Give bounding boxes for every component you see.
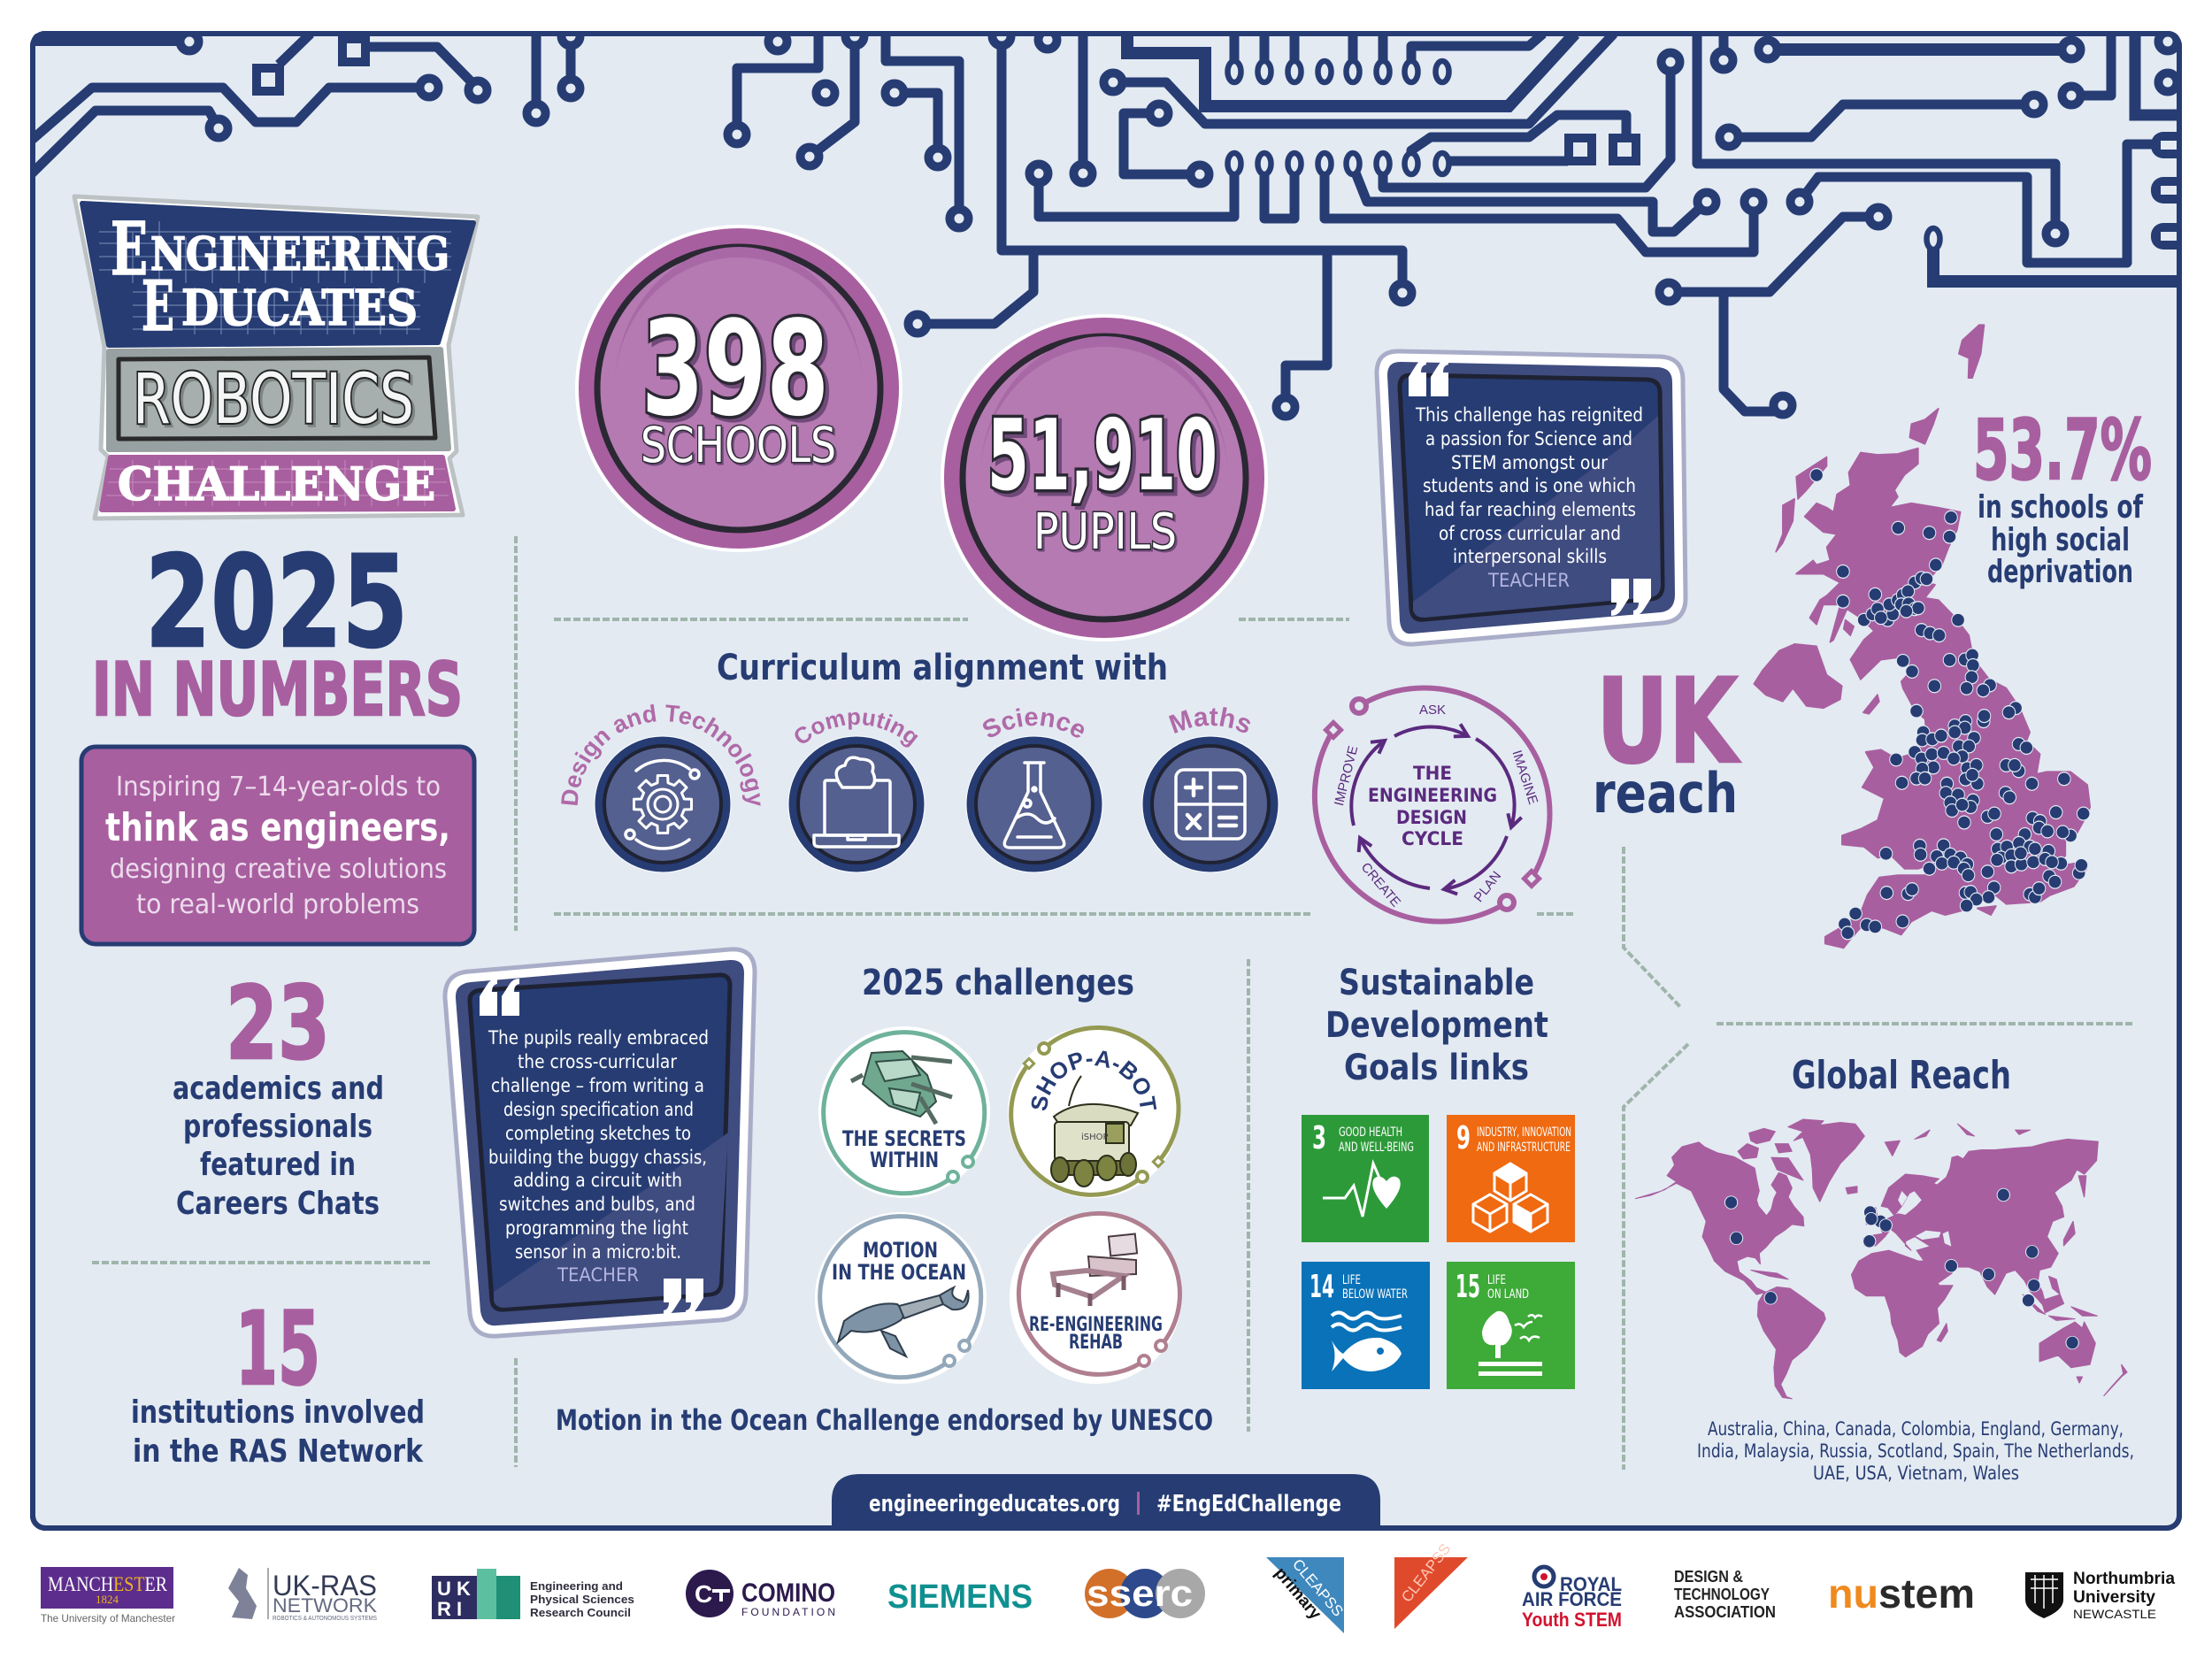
heading: Global Reach: Global Reach — [1792, 1053, 2011, 1098]
footer tab: website and hashtag — [832, 1474, 1380, 1530]
quote text: The pupils really embraced — [488, 1027, 709, 1048]
partner logo: UK-RAS Network: ROBOTICS & AUTONOMOUS SYSTEMS — [273, 1616, 377, 1622]
heading: Sustainable Development Goals links: Development — [1325, 1005, 1548, 1046]
challenge badge: Motion in the Ocean: IN THE OCEAN — [832, 1260, 966, 1285]
world map with country dots — [1635, 1119, 2127, 1399]
icon: laptop and cloud — [814, 757, 899, 847]
stat circle: 398 schools: 398 — [641, 293, 829, 445]
SDG tile 3: GOOD HEALTH — [1339, 1125, 1402, 1140]
partner logo: UKRI EPSRC: Research Council — [530, 1606, 631, 1619]
partner logo: UK-RAS Network: NETWORK — [273, 1594, 377, 1617]
quote text: a passion for Science and — [1425, 428, 1632, 449]
SDG tile 14 — [1302, 1262, 1430, 1389]
partner logo: Comino Foundation: FOUNDATION — [741, 1606, 835, 1618]
quote text: TEACHER — [1487, 570, 1570, 591]
challenge badge: Re-Engineering Rehab: REHAB — [1069, 1332, 1123, 1354]
curriculum heading: Curriculum alignment with — [717, 648, 1168, 688]
UNESCO endorsement line: Motion in the Ocean Challenge endorsed by UNESCO — [556, 1403, 1213, 1437]
heading: Sustainable Development Goals links: Sustainable — [1339, 963, 1534, 1003]
partner logo: University of Manchester: MANCHESTER — [48, 1573, 168, 1595]
quote text: sensor in a micro:bit. — [515, 1241, 681, 1263]
engineering design cycle: IMAGINE — [1509, 749, 1540, 806]
partner logo: SSERC: sserc — [1087, 1572, 1193, 1614]
partner logo: Royal Air Force Youth STEM: AIR FORCE — [1522, 1588, 1622, 1610]
purple mission box: designing creative solutions — [110, 854, 447, 885]
heading: 2025 in numbers — [92, 528, 463, 733]
engineering design cycle: PLAN — [1471, 869, 1504, 905]
logo banner: Engineering Educates: E — [142, 266, 174, 347]
partner logo: CLEAPSS design and technology: CLEAPSS — [1398, 1540, 1454, 1605]
quote text: building the buggy chassis, — [488, 1147, 707, 1168]
teacher quote panel: left — [445, 949, 755, 1336]
stat circle: 51,910 pupils: PUPILS — [1033, 503, 1177, 561]
UK map with school dots — [1754, 325, 2090, 948]
heading: UK reach: UK — [1596, 654, 1741, 790]
country dots — [1724, 1188, 2078, 1349]
partner logo: nustem: nustem — [1828, 1571, 1975, 1617]
quote text: design specification and — [503, 1099, 694, 1120]
partner logo: Northumbria University — [2025, 1570, 2175, 1621]
logo banner: Engineering Educates: E — [111, 207, 148, 292]
challenge badge: Shop-a-Bot — [1008, 1025, 1180, 1198]
quote text: interpersonal skills — [1453, 546, 1607, 567]
footer tab: website and hashtag: engineeringeducates.org — [869, 1491, 1120, 1517]
stat circle: 398 schools — [575, 225, 902, 552]
illustration: delivery robot — [1051, 1076, 1138, 1187]
icon: calculator — [1176, 770, 1245, 839]
quote text: completing sketches to — [505, 1123, 691, 1144]
country list — [1697, 1418, 2134, 1484]
partner logo: Northumbria University: University — [2073, 1588, 2155, 1607]
engineering design cycle: CYCLE — [1402, 828, 1463, 849]
partner logo: UKRI EPSRC: Engineering and — [530, 1579, 623, 1593]
curriculum: Design and Technology: Design and Technology — [561, 704, 761, 806]
heading: 2025 in numbers: IN NUMBERS — [92, 647, 463, 733]
quote text: had far reaching elements — [1425, 499, 1636, 520]
purple mission box: think as engineers, — [105, 805, 450, 850]
challenge badge: The Secrets Within: WITHIN — [870, 1148, 939, 1172]
engineering design cycle: THE — [1413, 763, 1452, 784]
partner logo: UKRI EPSRC: Physical Sciences — [530, 1593, 634, 1606]
SDG tile 3 — [1302, 1115, 1429, 1242]
stat: 23 academics and professionals — [173, 964, 384, 1222]
footer tab: website and hashtag: #EngEdChallenge — [1156, 1491, 1341, 1517]
logo: Engineering Educates Robotics Challenge — [74, 196, 478, 518]
partner logo: CLEAPSS design and technology — [1394, 1540, 1468, 1629]
SDG tile 15: 15 — [1455, 1269, 1480, 1305]
stat: 53.7% deprivation: in schools of — [1978, 489, 2143, 526]
quote text — [488, 1027, 709, 1286]
curriculum: Science: Science — [982, 708, 1084, 738]
stat: 15 institutions: 15 — [235, 1290, 320, 1408]
SDG tile 9: AND INFRASTRUCTURE — [1477, 1141, 1571, 1155]
SDG tile 15: ON LAND — [1487, 1287, 1529, 1302]
heading: 2025 challenges: 2025 challenges — [862, 963, 1134, 1003]
purple mission box: to real-world problems — [136, 889, 419, 920]
circuit board traces — [32, 27, 2205, 416]
logo banner: Robotics: ROBOTICS — [133, 360, 414, 440]
heading: UK reach: reach — [1593, 761, 1738, 826]
curriculum: Design and Technology — [561, 704, 761, 872]
heading: Sustainable Development Goals links — [1325, 963, 1548, 1088]
partner logo: University of Manchester: 1824 — [96, 1593, 119, 1606]
partner logo: Northumbria University: Northumbria — [2073, 1570, 2175, 1588]
curriculum: Computing: Computing — [795, 711, 918, 748]
partner logo: CLEAPSS primary: CLEAPSS — [1289, 1555, 1347, 1620]
curriculum: Computing — [787, 711, 926, 872]
closing quote mark — [664, 1279, 703, 1316]
partner logo: Comino Foundation — [686, 1570, 835, 1618]
engineering design cycle: CREATE — [1358, 860, 1403, 910]
quote text: the cross-curricular — [518, 1051, 677, 1072]
school location dots — [1810, 469, 2090, 940]
stat circle: 398 schools: SCHOOLS — [641, 417, 836, 473]
teacher quote panel: top — [1377, 351, 1686, 644]
illustration: rehab frame — [1053, 1233, 1137, 1306]
partner logo: Royal Air Force Youth STEM: Youth STEM — [1522, 1609, 1622, 1631]
quote text: adding a circuit with — [513, 1170, 682, 1191]
SDG tile 14: BELOW WATER — [1342, 1287, 1408, 1302]
opening quote mark — [1409, 359, 1448, 396]
partner logo: Siemens: SIEMENS — [887, 1578, 1033, 1616]
partner logo: UKRI EPSRC — [432, 1569, 634, 1620]
challenge badge: Shop-a-Bot: iSHOP — [1081, 1133, 1109, 1142]
purple mission box — [81, 747, 474, 944]
logo banner: Engineering Educates: NGINEERING — [150, 228, 449, 281]
stat: 15 institutions: institutions involved — [131, 1394, 425, 1431]
partner logo: University of Manchester: The University of Manchester — [41, 1612, 175, 1624]
challenge badge: The Secrets Within: THE SECRETS — [842, 1126, 966, 1151]
stat: 53.7% deprivation: deprivation — [1987, 554, 2133, 590]
logo banner: Engineering Educates — [82, 204, 473, 347]
stat circle: 51,910 pupils: 51,910 — [987, 399, 1217, 513]
SDG tile 15 — [1447, 1262, 1575, 1389]
icon: flask — [1004, 763, 1064, 848]
partner logo: CLEAPSS primary — [1266, 1555, 1347, 1633]
challenge badge: Motion in the Ocean — [815, 1212, 987, 1384]
engineering design cycle: ENGINEERING — [1368, 785, 1497, 806]
country list: Australia, China, Canada, Colombia, England, Germany, — [1708, 1418, 2124, 1440]
challenge badge: Re-Engineering Rehab: RE-ENGINEERING — [1029, 1314, 1163, 1336]
SDG tile 15: LIFE — [1487, 1273, 1506, 1287]
purple mission box: Inspiring 7–14-year-olds to — [116, 772, 441, 803]
partner logo: Design and Technology Association: ASSOCIATION — [1674, 1603, 1776, 1621]
quote text — [1415, 404, 1643, 591]
illustration: robotic whale — [838, 1287, 969, 1356]
stat: 53.7% deprivation: high social — [1991, 522, 2130, 558]
SDG tile 9: 9 — [1456, 1120, 1471, 1156]
engineering design cycle — [1315, 687, 1550, 921]
stat circle: 51,910 pupils — [941, 314, 1268, 641]
stat: 15 institutions: in the RAS Network — [133, 1433, 424, 1470]
quote text: programming the light — [505, 1217, 688, 1239]
partner logo: CLEAPSS primary: primary — [1271, 1564, 1325, 1624]
SDG tile 3: 3 — [1312, 1120, 1326, 1156]
dashed section dividers — [92, 536, 2134, 1470]
SDG tile 9 — [1447, 1115, 1575, 1242]
quote text: of cross curricular and — [1439, 523, 1621, 544]
partner logo: Comino Foundation: COMINO — [741, 1578, 835, 1608]
quote text: STEM amongst our — [1451, 452, 1608, 473]
logo banner: Robotics — [109, 349, 449, 449]
icon: gear — [626, 760, 699, 849]
stat: 23 academics and professionals: Careers Chats — [176, 1186, 380, 1222]
engineering design cycle: DESIGN — [1396, 807, 1467, 828]
heading: Sustainable Development Goals links: Goals links — [1344, 1048, 1529, 1088]
stat: 23 academics and professionals: featured in — [200, 1147, 356, 1183]
engineering design cycle: ASK — [1419, 703, 1446, 718]
partner logo: SSERC — [1085, 1569, 1205, 1618]
partner logo: UKRI EPSRC: R I — [437, 1598, 462, 1620]
partner logo: UKRI EPSRC: U K — [437, 1578, 471, 1600]
closing quote mark — [1611, 579, 1651, 616]
SDG tile 14: 14 — [1310, 1269, 1334, 1305]
stat: 53.7% deprivation — [1973, 403, 2152, 590]
partner logo: Royal Air Force Youth STEM: ROYAL — [1560, 1573, 1622, 1595]
curriculum: Science — [966, 708, 1102, 872]
opening quote mark — [480, 979, 519, 1016]
heading: 2025 in numbers: 2025 — [145, 528, 408, 676]
SDG tile 3: AND WELL-BEING — [1339, 1141, 1414, 1155]
illustration: green machine — [851, 1051, 952, 1124]
country list: UAE, USA, Vietnam, Wales — [1813, 1463, 2019, 1484]
partner logo: UK-RAS Network: UK-RAS — [273, 1570, 377, 1601]
quote text: challenge – from writing a — [491, 1075, 704, 1096]
SDG tile 9: INDUSTRY, INNOVATION — [1477, 1125, 1571, 1140]
challenge badge: Motion in the Ocean: MOTION — [863, 1238, 938, 1263]
curriculum: Maths — [1141, 707, 1279, 872]
partner logo: Design and Technology Association — [1674, 1568, 1776, 1621]
partner logo: Comino Foundation: C — [695, 1580, 712, 1608]
logo banner: Engineering Educates: DUCATES — [181, 279, 418, 336]
SDG tile 14: LIFE — [1342, 1273, 1361, 1287]
partner logo: Northumbria University: NEWCASTLE — [2073, 1607, 2156, 1621]
stat: 23 academics and professionals: professionals — [183, 1109, 373, 1145]
heading: UK reach — [1593, 654, 1741, 826]
partner logo: Design and Technology Association: TECHNOLOGY — [1674, 1586, 1770, 1603]
challenge badge: Shop-a-Bot: SHOP-A-BOT — [1032, 1051, 1157, 1111]
quote text: TEACHER — [557, 1264, 639, 1286]
logo banner: Challenge: CHALLENGE — [118, 458, 435, 511]
stat: 23 academics and professionals: 23 — [226, 964, 330, 1082]
challenge badge: The Secrets Within — [818, 1026, 990, 1198]
partner logo: UK-RAS Network — [228, 1568, 377, 1622]
partner logo: University of Manchester — [41, 1567, 175, 1624]
partner logo: Royal Air Force Youth STEM — [1522, 1567, 1622, 1631]
curriculum: Maths: Maths — [1169, 707, 1250, 733]
quote text: This challenge has reignited — [1415, 404, 1643, 426]
stat: 23 academics and professionals: academics and — [173, 1071, 384, 1107]
quote text: switches and bulbs, and — [499, 1194, 695, 1215]
stat: 15 institutions — [131, 1290, 425, 1470]
engineering design cycle: IMPROVE — [1332, 744, 1361, 808]
quote text: students and is one which — [1423, 475, 1636, 496]
partner logo: Design and Technology Association: DESIGN & — [1674, 1568, 1743, 1586]
challenge badge: Re-Engineering Rehab — [1010, 1212, 1181, 1384]
